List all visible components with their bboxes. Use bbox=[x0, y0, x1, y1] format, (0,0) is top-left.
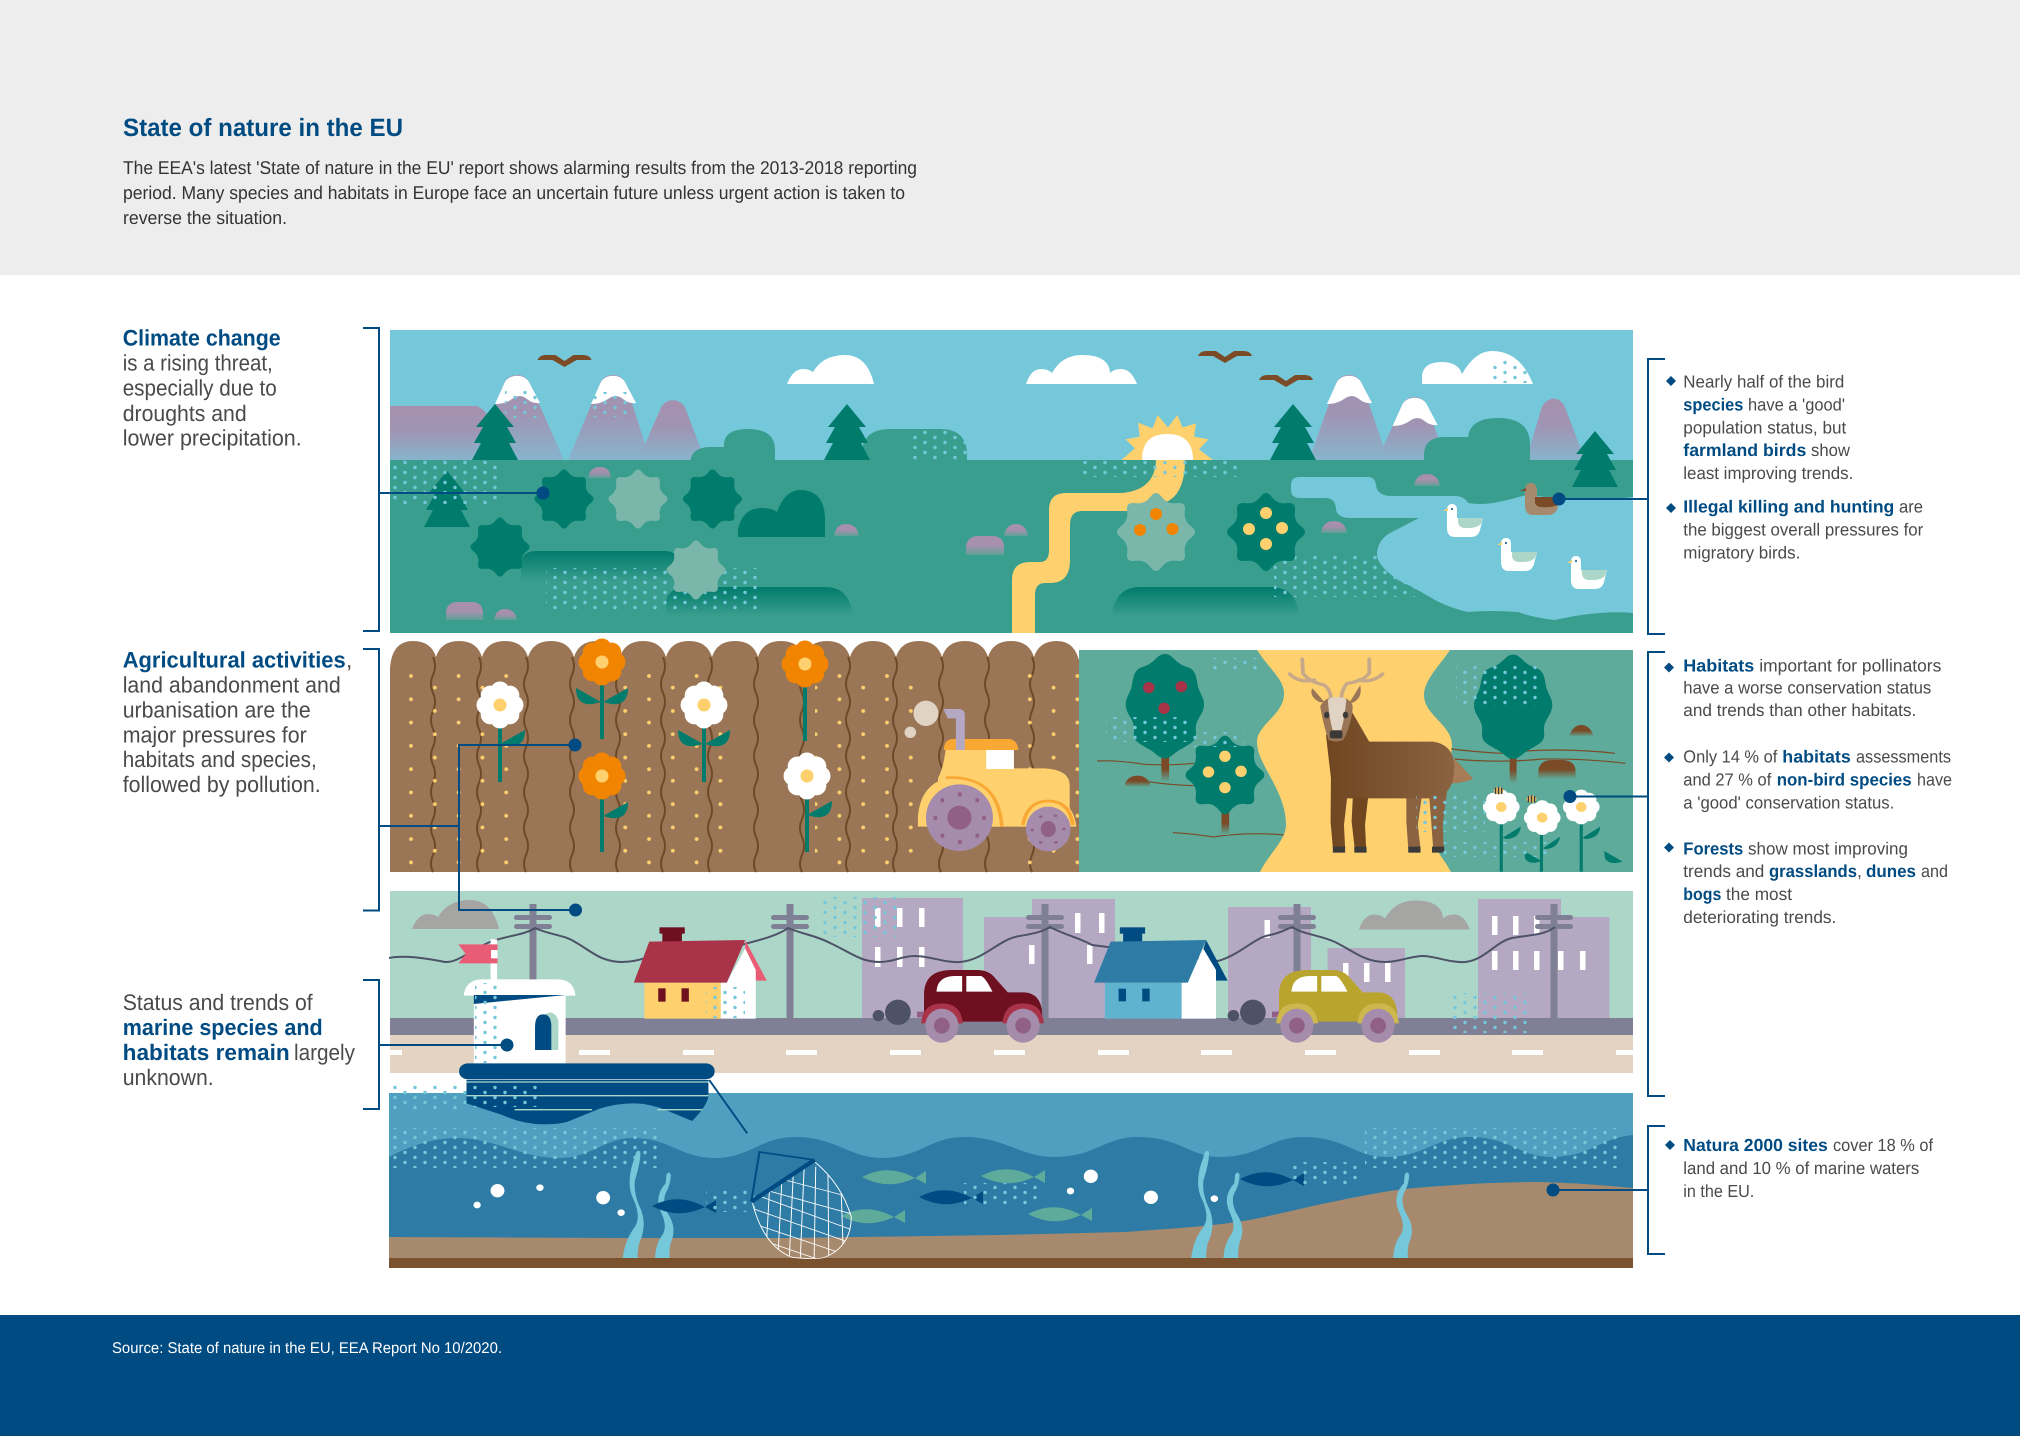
orange flower bbox=[579, 639, 625, 685]
bullet text: habitats: have a worse conservation status bbox=[1683, 678, 1932, 698]
ground bbox=[390, 460, 1633, 633]
left text: agriculture: habitats and species, bbox=[123, 747, 317, 772]
left text: marine: marine species and bbox=[123, 1015, 323, 1040]
clouds bbox=[787, 351, 1533, 384]
red house bbox=[634, 927, 767, 1019]
left text: agriculture: land abandonment and bbox=[123, 672, 341, 697]
left bracket: agriculture bbox=[363, 649, 581, 916]
flag bbox=[458, 939, 498, 981]
orange flower bbox=[579, 753, 625, 799]
utility poles bbox=[514, 904, 1573, 1018]
seaweed bbox=[623, 1151, 1412, 1258]
bullet text: birds: species bbox=[1683, 394, 1744, 414]
panel: birds and wildlife landscape bbox=[390, 330, 1633, 633]
sea dot patches bbox=[389, 1085, 1622, 1212]
bubbles bbox=[1067, 1170, 1218, 1204]
bullet text: habitats: grasslands bbox=[1769, 861, 1857, 881]
bullet text: habitats: have bbox=[1917, 770, 1952, 790]
bullet text: habitats: a 'good' conservation status. bbox=[1683, 792, 1894, 812]
ducks bbox=[1443, 504, 1607, 589]
dot patches bbox=[390, 360, 1527, 610]
seed dots bbox=[400, 670, 1079, 870]
bullet text: birds: show bbox=[1811, 440, 1850, 460]
bullet text: birds bbox=[1666, 372, 1923, 563]
source note: Source: State of nature in the EU, EEA Report No 10/2020. bbox=[112, 1340, 502, 1357]
pine trees bbox=[424, 404, 1618, 527]
bullet text: habitats: the most bbox=[1726, 884, 1792, 904]
panel: pollinators and deer meadow bbox=[1079, 650, 1633, 872]
yellow car bbox=[1228, 970, 1399, 1043]
daisy bbox=[784, 753, 830, 799]
soil with scalloped top bbox=[390, 641, 1080, 872]
bullet text: Natura 2000: land and 10 % of marine waters bbox=[1683, 1158, 1920, 1178]
furrows bbox=[431, 657, 1034, 872]
sun bbox=[1121, 415, 1214, 460]
left text: climate change bbox=[123, 326, 302, 451]
bullet text: birds: farmland birds bbox=[1683, 440, 1807, 460]
orange flower bbox=[782, 641, 828, 687]
fruit tree: orange bbox=[1117, 493, 1195, 571]
tree with red fruit bbox=[1126, 654, 1204, 782]
intro text: The EEA's latest 'State of nature in the EU' report shows alarming results from the 2013-2018 reporting bbox=[123, 157, 917, 178]
left text: agriculture: , bbox=[346, 647, 352, 672]
right bracket: birds bbox=[1554, 359, 1665, 634]
panel: sea and sea bed bbox=[389, 1085, 1633, 1277]
fishing boat bbox=[458, 939, 747, 1133]
left bracket: marine bbox=[363, 980, 512, 1109]
left text: agriculture: major pressures for bbox=[123, 722, 307, 748]
sand bbox=[389, 1182, 1633, 1260]
left text: climate change: Climate change bbox=[123, 326, 281, 350]
left bracket: climate change bbox=[363, 328, 548, 631]
deep water waves bbox=[389, 1135, 1633, 1260]
bullet text: birds: least improving trends. bbox=[1683, 463, 1853, 483]
fishing net bbox=[750, 1151, 852, 1259]
bullet text: birds: the biggest overall pressures for bbox=[1683, 520, 1923, 540]
hull dots bbox=[470, 1085, 543, 1107]
yellow clearing bbox=[1257, 650, 1452, 872]
bullet text: birds: population status, but bbox=[1683, 417, 1846, 437]
fish bbox=[652, 1169, 1304, 1223]
deer bbox=[1290, 659, 1473, 853]
purple rocks bbox=[446, 467, 1440, 620]
bullet text: Natura 2000: cover 18 % of bbox=[1833, 1135, 1933, 1155]
tractor bbox=[905, 701, 1076, 851]
bullet text: habitats: trends and bbox=[1683, 861, 1764, 881]
left text: climate change: is a rising threat, bbox=[123, 351, 273, 376]
road dashes bbox=[390, 1050, 1633, 1055]
bullet text: habitats: and bbox=[1921, 861, 1948, 881]
bullet text: Natura 2000: Natura 2000 sites bbox=[1683, 1135, 1828, 1155]
bullet text: birds: have a 'good' bbox=[1748, 394, 1845, 414]
ground lines bbox=[1097, 749, 1626, 837]
bullet text: habitats: habitats bbox=[1782, 746, 1851, 766]
bullet text: habitats: dunes bbox=[1866, 861, 1916, 881]
right bracket: Natura 2000 bbox=[1548, 1126, 1665, 1254]
bullet text: birds: are bbox=[1899, 497, 1923, 517]
header band bbox=[0, 0, 2020, 275]
left text: climate change: lower precipitation. bbox=[123, 426, 302, 451]
mounds bbox=[1125, 725, 1594, 787]
star shaped bushes bbox=[470, 469, 742, 600]
bullet text: habitats: bogs bbox=[1683, 884, 1722, 904]
bullet text: habitats bbox=[1664, 656, 1952, 927]
fruit tree: yellow bbox=[1227, 493, 1305, 571]
bullet text: habitats: show most improving bbox=[1748, 838, 1908, 858]
left text: climate change: droughts and bbox=[123, 401, 247, 426]
title: State of nature in the EU bbox=[123, 114, 403, 142]
bullet text: habitats: Habitats bbox=[1683, 656, 1755, 676]
town dot patches bbox=[706, 897, 1531, 1033]
daisy bbox=[681, 682, 727, 728]
bullet text: habitats: assessments bbox=[1856, 746, 1951, 766]
bullet text: birds: Illegal killing and hunting bbox=[1683, 497, 1894, 517]
left text: agriculture: followed by pollution. bbox=[123, 772, 321, 797]
red car bbox=[873, 970, 1044, 1043]
left text: agriculture bbox=[123, 647, 352, 797]
bullet text: Natura 2000 bbox=[1665, 1135, 1933, 1201]
right bracket: habitats bbox=[1564, 652, 1665, 1096]
birds bbox=[538, 351, 1313, 387]
bushes on horizon bbox=[690, 418, 1530, 490]
left text: climate change: especially due to bbox=[123, 376, 277, 401]
brown duck bbox=[1520, 483, 1560, 515]
power wire bbox=[389, 927, 1555, 962]
bubbles bbox=[473, 1184, 625, 1216]
tree with yellow fruit bbox=[1186, 736, 1264, 835]
road path bbox=[1012, 460, 1185, 633]
tall tree bbox=[1474, 655, 1552, 783]
snow caps bbox=[495, 376, 1438, 426]
fading hills bbox=[521, 551, 1299, 616]
panel: town and road bbox=[389, 891, 1633, 1073]
left text: agriculture: urbanisation are the bbox=[123, 698, 311, 722]
bullet text: habitats: deteriorating trends. bbox=[1683, 907, 1836, 927]
left text: marine: largely bbox=[294, 1040, 356, 1065]
bees bbox=[1494, 787, 1536, 803]
intro text: period. Many species and habitats in Europe face an uncertain future unless urgent action is taken to bbox=[123, 182, 905, 203]
grey clouds bbox=[412, 900, 1470, 930]
buildings bbox=[862, 898, 1610, 1018]
bullet text: habitats: and 27 % of bbox=[1683, 770, 1771, 790]
dark hill bbox=[738, 490, 825, 537]
mountains bbox=[390, 375, 1585, 460]
left text: agriculture: Agricultural activities bbox=[123, 647, 346, 672]
lake bbox=[1291, 477, 1633, 620]
meadow daisies bbox=[1483, 790, 1600, 835]
blue dot patches bbox=[1106, 658, 1550, 857]
cabin bbox=[464, 979, 575, 1064]
bullet text: habitats: Only 14 % of bbox=[1683, 746, 1777, 766]
bullet text: habitats: non-bird species bbox=[1777, 770, 1912, 790]
bullet text: habitats: , bbox=[1857, 861, 1862, 881]
footer band bbox=[0, 1315, 2020, 1436]
left text: marine: habitats remain bbox=[123, 1040, 290, 1065]
intro text: reverse the situation. bbox=[123, 207, 287, 228]
cabin dots bbox=[475, 983, 499, 1063]
bullet text: Natura 2000: in the EU. bbox=[1683, 1181, 1754, 1201]
bullet text: habitats: and trends than other habitats. bbox=[1683, 700, 1916, 720]
building windows bbox=[875, 908, 1586, 982]
blue house bbox=[1094, 927, 1228, 1019]
bullet text: birds: Nearly half of the bird bbox=[1683, 372, 1844, 392]
meadow flower stems bbox=[1500, 822, 1623, 872]
bullet text: birds: migratory birds. bbox=[1683, 543, 1800, 563]
left text: marine: Status and trends of bbox=[123, 990, 313, 1015]
bullet text: habitats: Forests bbox=[1683, 838, 1744, 858]
hull bbox=[459, 1063, 747, 1133]
panel: agriculture field bbox=[390, 639, 1080, 872]
left text: marine: unknown. bbox=[123, 1065, 214, 1090]
daisy bbox=[477, 682, 523, 728]
stems and leaves bbox=[498, 680, 832, 852]
road bbox=[390, 1018, 1633, 1035]
left text: marine bbox=[123, 990, 356, 1090]
bullet text: habitats: important for pollinators bbox=[1759, 656, 1942, 676]
intro text bbox=[123, 157, 917, 228]
